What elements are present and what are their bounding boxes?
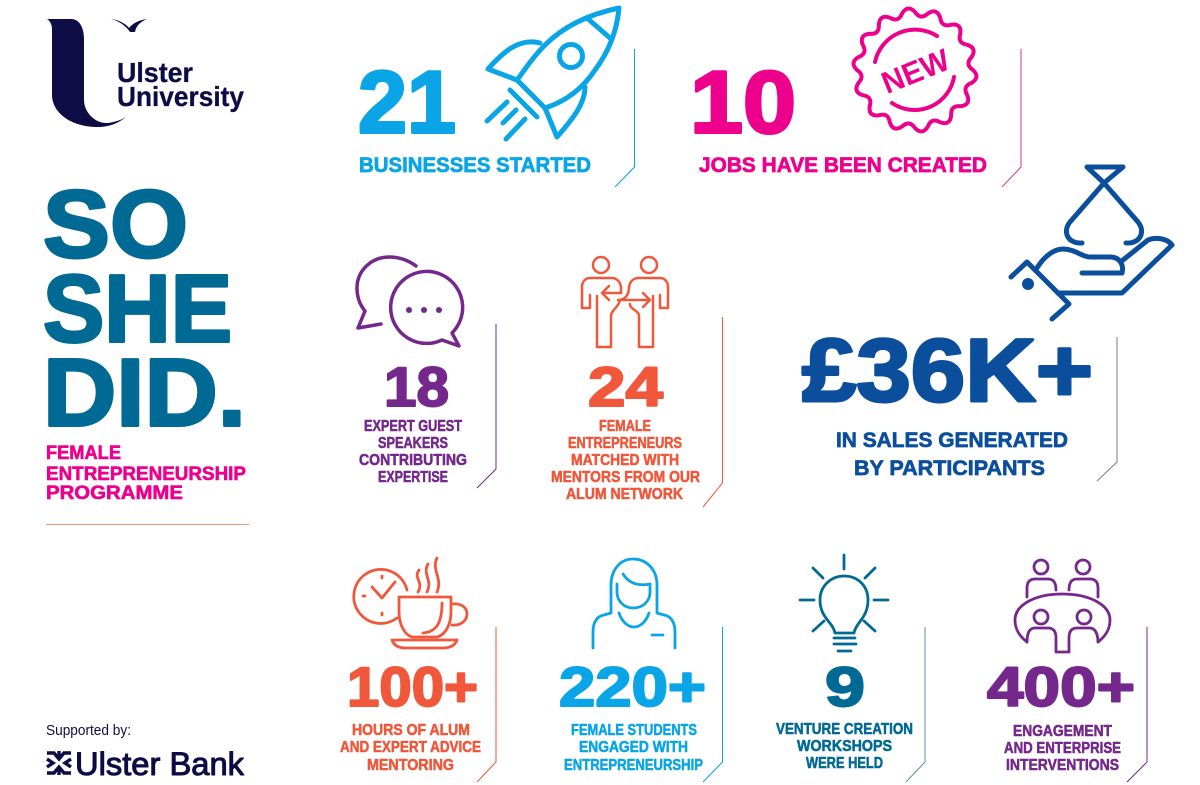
icon: new badge xyxy=(854,9,976,131)
panel: female students xyxy=(559,559,722,782)
icon: speech bubbles xyxy=(357,257,463,346)
text: mentors label xyxy=(551,418,700,503)
title: So She Did. xyxy=(43,171,246,446)
panel: mentors matched: 24 xyxy=(588,355,663,418)
text: students label: ENTREPRENEURSHIP xyxy=(564,757,703,774)
panel: engagement interventions xyxy=(987,560,1147,782)
text: engagement label: AND ENTERPRISE xyxy=(1004,740,1121,757)
panel: businesses started: BUSINESSES STARTED xyxy=(359,153,591,177)
panel: expert guest speakers xyxy=(357,257,496,488)
icon: woman xyxy=(593,559,675,648)
logo: Ulster University: University xyxy=(117,81,244,112)
panel: sales generated: BY PARTICIPANTS xyxy=(854,456,1045,480)
text: workshops label xyxy=(776,721,913,772)
text: speakers label xyxy=(359,418,467,486)
text: workshops label: WORKSHOPS xyxy=(797,738,892,755)
text: hours label: HOURS OF ALUM xyxy=(352,722,470,739)
text: mentors label: ENTREPRENEURS xyxy=(568,435,682,452)
panel: hours of advice xyxy=(340,558,496,782)
text: hours label: AND EXPERT ADVICE xyxy=(340,739,481,756)
icon: light bulb xyxy=(800,555,888,651)
text: mentors label: ALUM NETWORK xyxy=(566,486,684,503)
text: mentors label: MATCHED WITH xyxy=(571,452,679,469)
icon: Ulster Bank mark xyxy=(47,751,71,775)
subtitle: female entrepreneurship programme xyxy=(46,443,246,504)
panel: venture creation workshops: 9 xyxy=(825,655,865,718)
supporter: Ulster Bank xyxy=(46,723,245,782)
supporter: Ulster Bank: Ulster Bank xyxy=(75,746,245,782)
text: engagement label xyxy=(1004,723,1121,774)
icon: new badge: NEW xyxy=(877,42,955,101)
title: So She Did.: SHE xyxy=(43,256,232,362)
panel: sales generated xyxy=(802,167,1172,481)
panel: hours of advice: 100+ xyxy=(347,655,478,718)
panel: jobs created: 10 xyxy=(690,52,796,152)
text: hours label xyxy=(340,722,481,774)
panel: sales generated: £36K+ xyxy=(802,320,1093,420)
panel: sales generated: IN SALES GENERATED xyxy=(836,428,1068,452)
panel: expert guest speakers: 18 xyxy=(384,355,449,418)
text: speakers label: EXPERT GUEST xyxy=(364,418,462,435)
text: engagement label: ENGAGEMENT xyxy=(1013,723,1112,740)
text: students label: FEMALE STUDENTS xyxy=(571,722,697,739)
icon: two people exchanging xyxy=(582,257,668,347)
panel: female students: 220+ xyxy=(559,655,706,718)
title: So She Did.: DID. xyxy=(43,340,246,446)
text: mentors label: MENTORS FROM OUR xyxy=(551,469,700,486)
text: mentors label: FEMALE xyxy=(599,418,651,435)
panel: businesses started: 21 xyxy=(358,52,456,152)
panel: jobs created: JOBS HAVE BEEN CREATED xyxy=(699,153,987,177)
panel: mentors matched xyxy=(551,257,722,507)
icon: meeting around a table xyxy=(1015,560,1110,652)
logo: Ulster University: Ulster xyxy=(117,57,193,88)
subtitle: female entrepreneurship programme: ENTREPRENEURSHIP xyxy=(46,464,246,485)
text: workshops label: WERE HELD xyxy=(806,755,883,772)
text: hours label: MENTORING xyxy=(367,757,454,774)
panel: venture creation workshops xyxy=(776,555,925,782)
text: students label xyxy=(564,722,703,774)
icon: rocket xyxy=(487,8,619,139)
icon: clock and coffee cup xyxy=(354,558,467,648)
icon: hand holding money bag xyxy=(1011,167,1172,319)
panel: jobs created xyxy=(690,9,1021,187)
logo: Ulster University xyxy=(47,19,244,127)
panel: engagement interventions: 400+ xyxy=(987,655,1135,718)
text: engagement label: INTERVENTIONS xyxy=(1006,757,1119,774)
subtitle: female entrepreneurship programme: PROGRAMME xyxy=(46,483,183,504)
text: speakers label: CONTRIBUTING xyxy=(359,452,467,469)
text: students label: ENGAGED WITH xyxy=(579,739,688,756)
subtitle: female entrepreneurship programme: FEMALE xyxy=(46,443,121,464)
panel: businesses started xyxy=(358,8,634,187)
title: So She Did.: SO xyxy=(43,171,188,278)
text: speakers label: SPEAKERS xyxy=(378,435,448,452)
text: workshops label: VENTURE CREATION xyxy=(776,721,913,738)
text: speakers label: EXPERTISE xyxy=(378,469,448,486)
supporter: Ulster Bank: Supported by: xyxy=(46,723,131,739)
